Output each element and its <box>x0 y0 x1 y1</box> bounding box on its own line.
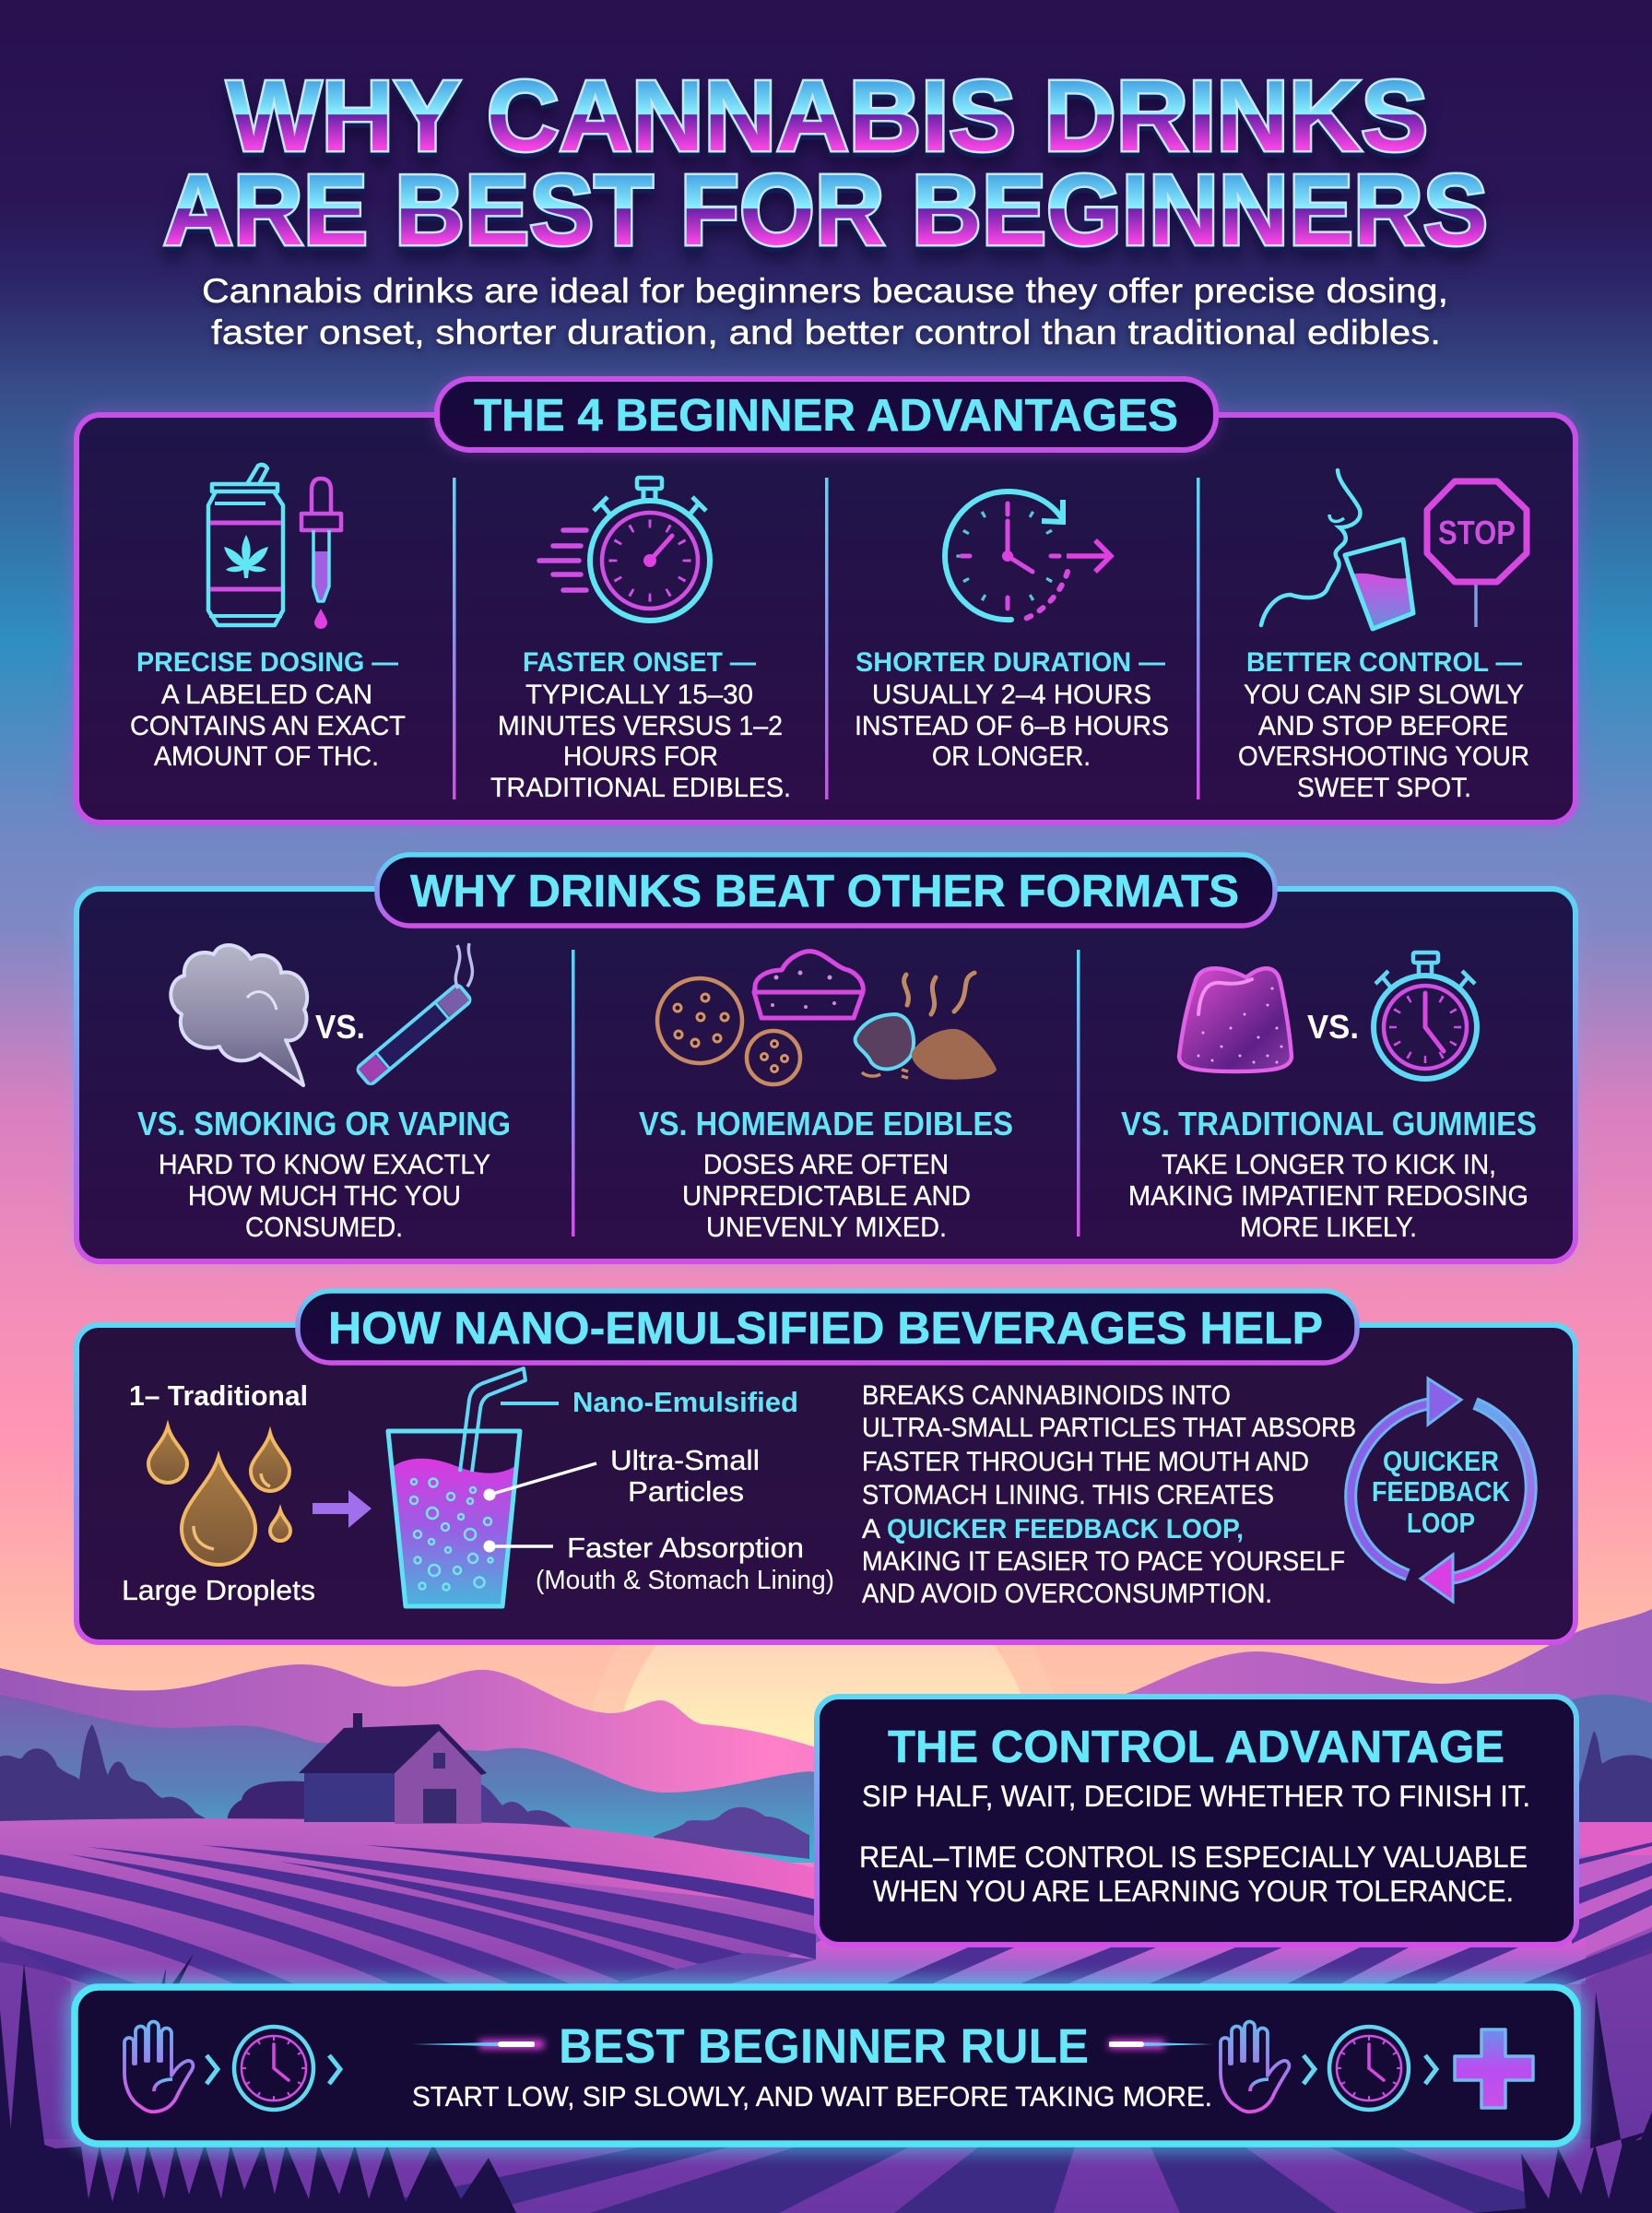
icon: smoke cloud vs cigarette <box>171 943 472 1085</box>
decorative glow line right <box>1109 2040 1213 2049</box>
intro text: faster onset, shorter duration, and better control than traditional edibles. <box>211 314 1441 351</box>
text: control advantage body: REAL–TIME CONTROL IS ESPECIALLY VALUABLE <box>859 1840 1528 1874</box>
callout: nano-emulsified: Nano-Emulsified <box>572 1386 798 1418</box>
intro text <box>202 272 1448 351</box>
panel: best beginner rule <box>75 1987 1577 2144</box>
callout: faster absorption <box>483 1532 834 1595</box>
text: control advantage body: SIP HALF, WAIT, DECIDE WHETHER TO FINISH IT. <box>862 1780 1530 1813</box>
text: better control <box>1238 647 1529 803</box>
column: better control <box>1238 470 1529 803</box>
callout: ultra-small particles: Ultra-Small <box>610 1444 760 1476</box>
icon: clock with arrow <box>945 491 1111 620</box>
icon: sequence hand, clock, plus (right) <box>1221 2021 1533 2112</box>
main title: ARE BEST FOR BEGINNERS <box>163 154 1488 266</box>
text: precise dosing <box>130 647 406 772</box>
text: better control: OVERSHOOTING YOUR <box>1238 741 1529 772</box>
icon: can and dropper <box>208 465 341 629</box>
heading pill: how nano-emulsified beverages help <box>298 1291 1357 1363</box>
panel: how nano-emulsified beverages help <box>77 1291 1575 1642</box>
column: vs smoking or vaping <box>137 943 511 1243</box>
arrow: droplets to nano drink <box>313 1490 372 1528</box>
diagram: traditional droplets <box>122 1379 315 1606</box>
text: shorter duration: SHORTER DURATION — <box>856 647 1165 678</box>
column: vs homemade edibles <box>639 952 1013 1243</box>
icon: large oil droplets <box>148 1426 290 1565</box>
text: shorter duration: INSTEAD OF 6–B HOURS <box>855 711 1169 741</box>
text: faster onset: HOURS FOR <box>563 741 718 772</box>
diagram: traditional droplets: Large Droplets <box>122 1574 315 1606</box>
foreground grass <box>0 1954 1652 2213</box>
callout: faster absorption: (Mouth & Stomach Lining) <box>536 1566 834 1595</box>
decorative furrows <box>0 1842 1652 2213</box>
text: how nano-emulsion works: A <box>862 1514 880 1544</box>
panel: the control advantage <box>817 1697 1576 1945</box>
icon: quicker feedback loop arrows <box>1351 1379 1531 1602</box>
text: how nano-emulsion works: AND AVOID OVERCONSUMPTION. <box>862 1579 1272 1609</box>
text: how nano-emulsion works: MAKING IT EASIER TO PACE YOURSELF <box>862 1546 1345 1577</box>
icon: quicker feedback loop arrows: FEEDBACK <box>1372 1475 1511 1508</box>
text: vs smoking or vaping: CONSUMED. <box>245 1211 403 1243</box>
panel: the 4 beginner advantages <box>77 379 1575 822</box>
icon: profile sipping and stop sign: STOP <box>1438 514 1516 551</box>
text: vs traditional gummies: MAKING IMPATIENT REDOSING <box>1128 1179 1528 1212</box>
intro text: Cannabis drinks are ideal for beginners because they offer precise dosing, <box>202 272 1448 310</box>
icon: gummy vs stopwatch: VS. <box>1307 1008 1359 1046</box>
text: how nano-emulsion works: ULTRA-SMALL PARTICLES THAT ABSORB <box>862 1413 1356 1443</box>
heading: best beginner rule: BEST BEGINNER RULE <box>559 2019 1089 2074</box>
heading pill: the 4 beginner advantages <box>437 379 1216 450</box>
text: how nano-emulsion works: STOMACH LINING. THIS CREATES <box>862 1480 1274 1510</box>
text: vs traditional gummies: TAKE LONGER TO KICK IN, <box>1162 1148 1496 1180</box>
text: control advantage body <box>859 1780 1530 1908</box>
text: better control: SWEET SPOT. <box>1297 773 1471 803</box>
text: better control: BETTER CONTROL — <box>1246 647 1522 678</box>
text: vs homemade edibles: UNEVENLY MIXED. <box>706 1211 947 1243</box>
icon: stop hand <box>1221 2021 1289 2112</box>
text: control advantage body: WHEN YOU ARE LEARNING YOUR TOLERANCE. <box>873 1875 1514 1908</box>
text: shorter duration: USUALLY 2–4 HOURS <box>872 680 1151 710</box>
text: start low, sip slowly: START LOW, SIP SLOWLY, AND WAIT BEFORE TAKING MORE. <box>412 2080 1212 2112</box>
icon: gummy vs stopwatch <box>1179 953 1477 1079</box>
icon: smoke cloud vs cigarette: VS. <box>315 1008 365 1046</box>
text: faster onset: TRADITIONAL EDIBLES. <box>490 773 791 803</box>
decorative glow line left <box>413 2040 544 2049</box>
diagram: nano-emulsified glass <box>388 1368 834 1606</box>
text: precise dosing: AMOUNT OF THC. <box>154 741 379 772</box>
heading pill: why drinks beat other formats: WHY DRINKS BEAT OTHER FORMATS <box>410 867 1239 917</box>
icon: quicker feedback loop arrows: LOOP <box>1407 1507 1475 1539</box>
text: faster onset <box>490 647 791 803</box>
main title: WHY CANNABIS DRINKS <box>227 60 1428 172</box>
diagram: traditional droplets: 1– Traditional <box>129 1379 308 1412</box>
text: vs homemade edibles: UNPREDICTABLE AND <box>682 1179 971 1212</box>
text: how nano-emulsion works: QUICKER FEEDBACK LOOP, <box>887 1514 1244 1544</box>
icon: quicker feedback loop arrows: QUICKER <box>1383 1445 1499 1477</box>
icon: glass with particles and straw <box>388 1368 525 1606</box>
panel: why drinks beat other formats <box>77 855 1575 1261</box>
background landscape <box>0 1529 1652 2213</box>
icon: plus <box>1455 2030 1533 2108</box>
main title <box>163 60 1488 266</box>
text: precise dosing: PRECISE DOSING — <box>136 647 398 678</box>
text: how nano-emulsion works: FASTER THROUGH THE MOUTH AND <box>862 1447 1309 1477</box>
text: shorter duration <box>855 647 1169 772</box>
icon: clock <box>234 2027 313 2110</box>
icon: profile sipping and stop sign <box>1261 470 1527 629</box>
text: how nano-emulsion works: BREAKS CANNABINOIDS INTO <box>862 1380 1231 1411</box>
heading pill: the 4 beginner advantages: THE 4 BEGINNER ADVANTAGES <box>474 391 1178 441</box>
callout: ultra-small particles <box>483 1444 760 1508</box>
farmhouse <box>299 1713 487 1824</box>
heading: the control advantage: THE CONTROL ADVANTAGE <box>888 1722 1504 1772</box>
text: vs smoking or vaping: HOW MUCH THC YOU <box>188 1179 461 1212</box>
column: precise dosing <box>130 465 406 772</box>
text: vs smoking or vaping: HARD TO KNOW EXACTLY <box>159 1148 490 1180</box>
text: vs homemade edibles: VS. HOMEMADE EDIBLES <box>639 1105 1013 1142</box>
heading pill: why drinks beat other formats <box>377 855 1275 926</box>
callout: faster absorption: Faster Absorption <box>567 1532 804 1564</box>
text: vs smoking or vaping: VS. SMOKING OR VAPING <box>137 1105 511 1142</box>
text: vs smoking or vaping <box>137 1105 511 1243</box>
text: vs traditional gummies: MORE LIKELY. <box>1240 1211 1417 1243</box>
text: how nano-emulsion works <box>862 1380 1356 1609</box>
column: shorter duration <box>855 491 1169 772</box>
text: vs homemade edibles: DOSES ARE OFTEN <box>703 1148 949 1180</box>
icon: stop hand <box>124 2021 193 2112</box>
text: shorter duration: OR LONGER. <box>932 741 1091 772</box>
text: faster onset: TYPICALLY 15–30 <box>525 680 753 710</box>
text: faster onset: MINUTES VERSUS 1–2 <box>498 711 783 741</box>
text: precise dosing: A LABELED CAN <box>161 680 372 710</box>
text: vs homemade edibles <box>639 1105 1013 1243</box>
column: faster onset <box>490 478 791 803</box>
text: vs traditional gummies <box>1121 1105 1537 1243</box>
icon: cookies, pie and brownies <box>657 952 997 1084</box>
icon: stopwatch with speed lines <box>539 478 710 621</box>
icon: sequence hand, clock (left) <box>124 2021 340 2112</box>
text: better control: AND STOP BEFORE <box>1258 711 1508 741</box>
icon: clock <box>1329 2027 1409 2110</box>
text: precise dosing: CONTAINS AN EXACT <box>130 711 406 741</box>
text: faster onset: FASTER ONSET — <box>523 647 756 678</box>
text: vs traditional gummies: VS. TRADITIONAL GUMMIES <box>1121 1105 1537 1142</box>
text: better control: YOU CAN SIP SLOWLY <box>1244 680 1524 710</box>
heading pill: how nano-emulsified beverages help: HOW NANO-EMULSIFIED BEVERAGES HELP <box>328 1304 1323 1354</box>
column: vs traditional gummies <box>1121 953 1537 1243</box>
callout: ultra-small particles: Particles <box>628 1475 744 1508</box>
